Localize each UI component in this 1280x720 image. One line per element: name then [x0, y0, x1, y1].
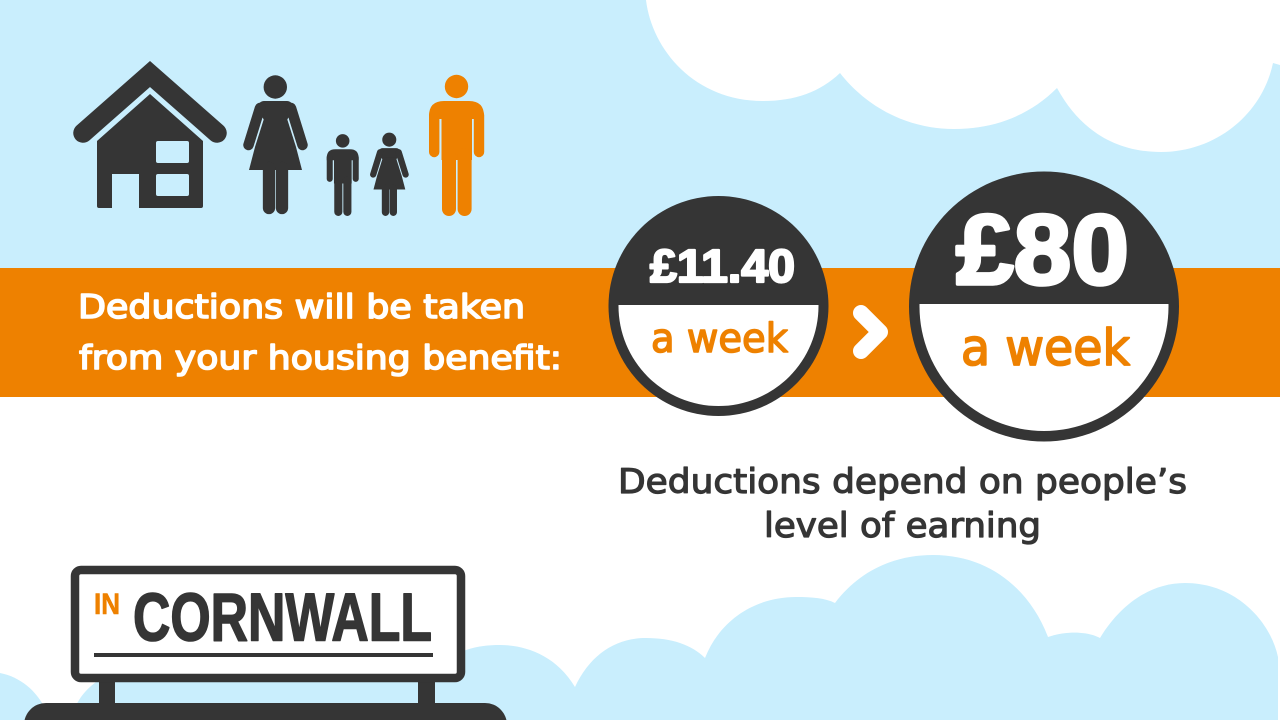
caption: deductions depend on earnings	[618, 462, 1187, 546]
sign: in Cornwall	[24, 570, 507, 720]
sign: in Cornwall: CORNWALL	[133, 580, 432, 656]
sign: in Cornwall: IN	[94, 588, 120, 621]
heading: deductions from housing benefit: Deductions will be taken	[78, 287, 525, 326]
sky background	[0, 0, 1280, 397]
icon: woman	[248, 75, 302, 208]
badge: £11.40 a week	[608, 196, 828, 416]
icon: boy	[327, 134, 359, 212]
heading: deductions from housing benefit: from your housing benefit:	[79, 338, 562, 377]
icon: girl	[373, 133, 406, 212]
orange band	[0, 268, 1280, 397]
badge: £80 a week: £80	[956, 194, 1129, 305]
icon: house	[83, 74, 217, 208]
bottom blue cloud	[440, 555, 1278, 720]
badge: £11.40 a week: a week	[651, 316, 789, 362]
badge: £80 a week: a week	[961, 319, 1130, 377]
icon: man in orange	[429, 75, 484, 209]
heading: deductions from housing benefit	[78, 287, 562, 377]
cloud behind sign	[74, 660, 480, 720]
caption: deductions depend on earnings: level of earning	[764, 506, 1041, 546]
arrow: chevron	[861, 313, 880, 351]
caption: deductions depend on earnings: Deductions depend on people’s	[618, 462, 1187, 502]
bottom left cloud	[0, 673, 46, 720]
badge: £80 a week	[909, 172, 1179, 442]
top white cloud	[646, 0, 1280, 152]
badge: £11.40 a week: £11.40	[650, 240, 795, 292]
